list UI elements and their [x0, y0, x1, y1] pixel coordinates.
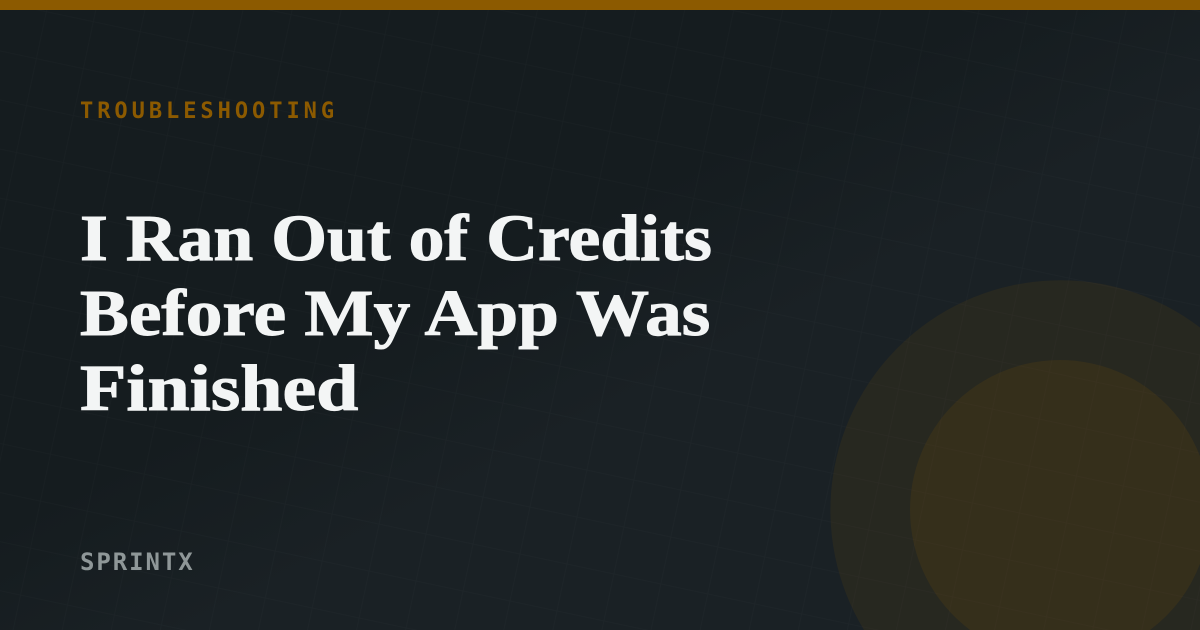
title: I Ran Out of Credits [80, 202, 712, 274]
title: Before My App Was [80, 277, 710, 350]
decorative outer circle [830, 280, 1200, 630]
title: Finished [80, 352, 358, 425]
decorative inner circle [910, 360, 1200, 630]
category label: TROUBLESHOOTING [80, 99, 338, 124]
top accent bar [0, 0, 1200, 10]
title [80, 202, 712, 425]
brand name: SPRINTX [80, 548, 195, 576]
